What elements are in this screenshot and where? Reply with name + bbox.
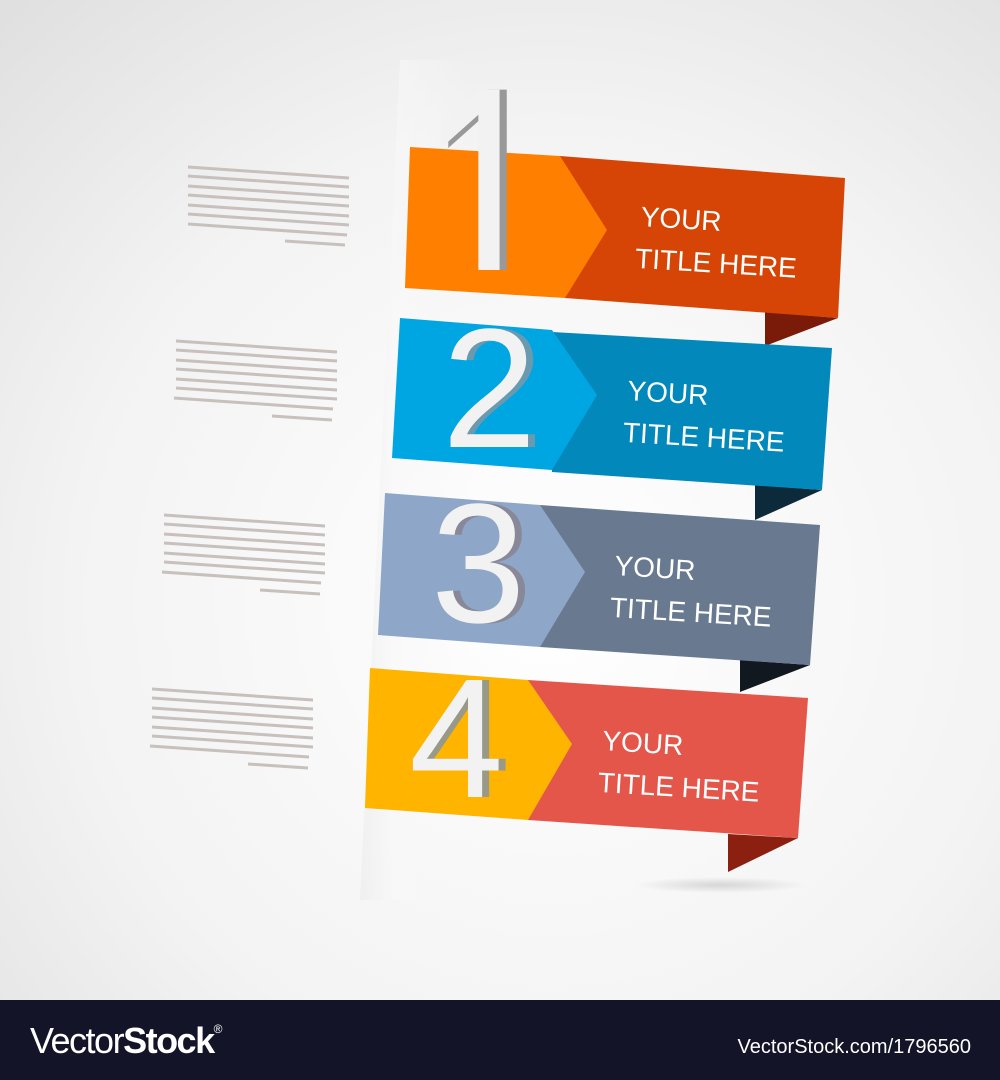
number 4: 4 <box>416 644 511 834</box>
paper strip <box>360 60 470 900</box>
ribbon 4: 4 <box>409 644 504 834</box>
title 1: TITLE HERE <box>634 243 798 284</box>
ribbon 4 <box>365 644 808 872</box>
text block 3 <box>162 515 325 594</box>
title 4 <box>597 725 763 808</box>
title 4: TITLE HERE <box>597 767 760 808</box>
text block 1 <box>188 167 349 245</box>
footer id: VectorStock.com/1796560 <box>738 1036 971 1058</box>
title 2 <box>622 375 788 458</box>
number 1 <box>448 90 507 270</box>
ribbon 2: 2 <box>442 294 537 484</box>
title 3: TITLE HERE <box>609 592 772 633</box>
ribbon 1 <box>405 90 845 344</box>
title 1: YOUR <box>640 201 723 237</box>
title 4: YOUR <box>602 725 684 761</box>
title 3: YOUR <box>614 550 696 586</box>
number 2: 2 <box>449 294 544 484</box>
number 1: 1 <box>418 24 551 360</box>
footer logo: VectorStock <box>30 1020 214 1061</box>
title 2: TITLE HERE <box>622 417 785 458</box>
title 1 <box>634 201 800 284</box>
number 3: 3 <box>438 469 533 659</box>
text block 4 <box>150 689 313 768</box>
footer bar <box>0 1000 1000 1080</box>
title 2: YOUR <box>627 375 709 411</box>
ribbon 3 <box>378 469 820 692</box>
shadow under ribbon 4 <box>635 877 805 893</box>
text block 2 <box>174 341 337 420</box>
ribbon 2 <box>392 294 832 520</box>
footer logo: ® <box>214 1022 223 1036</box>
title 3 <box>609 550 775 633</box>
ribbon 3: 3 <box>431 469 526 659</box>
number 1: 1 <box>425 24 559 360</box>
